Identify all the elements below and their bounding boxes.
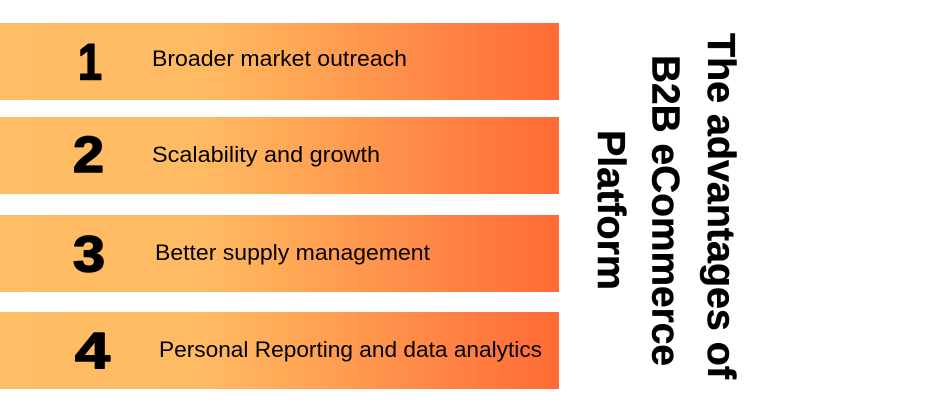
number 2: 2 bbox=[73, 126, 104, 183]
title, rotated bbox=[589, 33, 742, 380]
label 2: Scalability and growth bbox=[152, 142, 380, 167]
label 4: Personal Reporting and data analytics bbox=[159, 337, 542, 362]
panel: bar 4 bbox=[0, 312, 559, 389]
number 3: 3 bbox=[73, 226, 105, 282]
number 1: 1 bbox=[78, 34, 102, 90]
panel: bar 1 bbox=[0, 23, 559, 100]
title line 1: The advantages of bbox=[699, 33, 742, 380]
panel: bar 2 bbox=[0, 117, 559, 194]
title line 2: B2B eCommerce bbox=[644, 55, 686, 366]
number 4: 4 bbox=[75, 322, 111, 379]
label 1: Broader market outreach bbox=[152, 46, 407, 71]
title line 3: Platform bbox=[589, 130, 632, 290]
panel: bar 3 bbox=[0, 215, 559, 292]
label 3: Better supply management bbox=[155, 240, 430, 265]
